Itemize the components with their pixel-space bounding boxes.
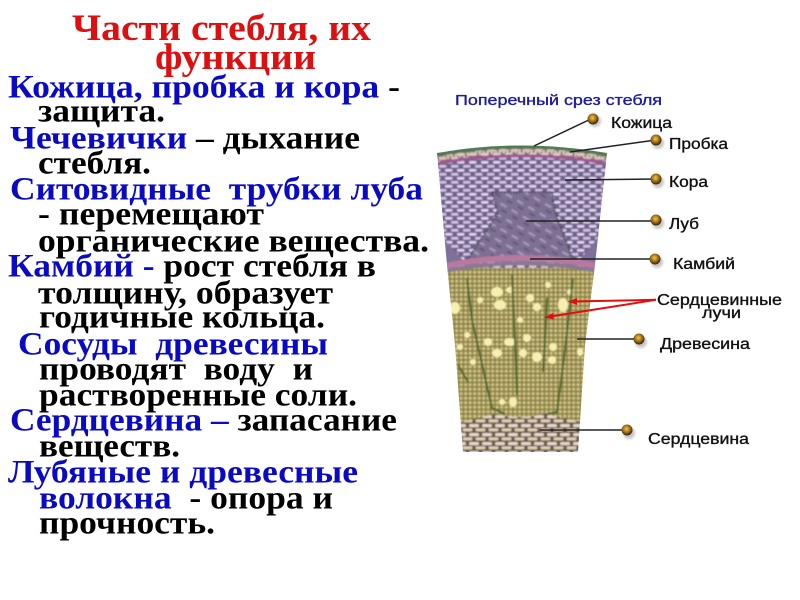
labels: Пробка [669, 136, 728, 153]
item: fibres: прочность. [39, 506, 215, 542]
item: sieve tubes: Ситовидные трубки луба [10, 172, 423, 208]
skin and cork [435, 146, 610, 164]
item: lenticels: Чечевички – дыхание [10, 120, 360, 156]
labels: Кора [669, 174, 708, 191]
diagram: stem cross-section [430, 92, 782, 455]
labels: Сердцевинные [657, 292, 782, 309]
icons: label markers [588, 114, 664, 439]
item: wood vessels [18, 326, 357, 414]
item: fibres: волокна - опора и [39, 480, 333, 516]
item: wood vessels: Сосуды древесины [18, 326, 328, 362]
cortex layer [437, 146, 607, 269]
item: fibres: Лубяные и древесные [8, 454, 358, 490]
item: sieve tubes: органические вещества. [38, 224, 429, 260]
item: wood vessels: растворенные соли. [39, 378, 357, 414]
item: wood vessels: проводят воду и [39, 352, 313, 388]
item: lenticels: стебля. [38, 146, 151, 182]
leader lines [526, 118, 656, 430]
item: cambium [8, 248, 376, 336]
item: cambium: годичные кольца. [39, 300, 325, 336]
wood [448, 267, 594, 424]
cambium [445, 258, 598, 271]
item: lenticels [10, 120, 360, 182]
item: pith: веществ. [39, 428, 180, 464]
diagram heading: Поперечный срез стебля [455, 92, 662, 109]
labels: Кожица [611, 115, 672, 132]
labels: Камбий [673, 256, 735, 273]
item: cambium: Камбий - рост стебля в [8, 248, 376, 284]
item: fibres [8, 454, 358, 542]
item: sieve tubes [10, 172, 429, 260]
item: pith: Сердцевина – запасание [10, 402, 397, 438]
wood rays [458, 275, 573, 416]
arrows: medullary rays [544, 298, 656, 320]
item: sieve tubes: - перемещают [38, 196, 264, 232]
labels: Сердцевина [648, 431, 749, 448]
title: Части стебля, их [72, 8, 372, 49]
title [72, 8, 372, 78]
labels: лучи [702, 305, 741, 322]
title: функции [155, 37, 316, 78]
item: skin, cork and cortex: Кожица, пробка и кора - [8, 70, 400, 106]
wood vessels [450, 282, 583, 407]
pith [460, 414, 580, 452]
item: cambium: толщину, образует [38, 276, 333, 312]
item: skin, cork and cortex [8, 70, 400, 130]
item: pith [10, 402, 397, 464]
labels: Луб [669, 216, 699, 233]
labels [611, 115, 782, 448]
stem illustration [437, 146, 607, 452]
bast [440, 192, 600, 262]
item: skin, cork and cortex: защита. [38, 94, 165, 130]
text block: functions of stem parts [8, 70, 429, 542]
labels: Древесина [660, 336, 750, 353]
